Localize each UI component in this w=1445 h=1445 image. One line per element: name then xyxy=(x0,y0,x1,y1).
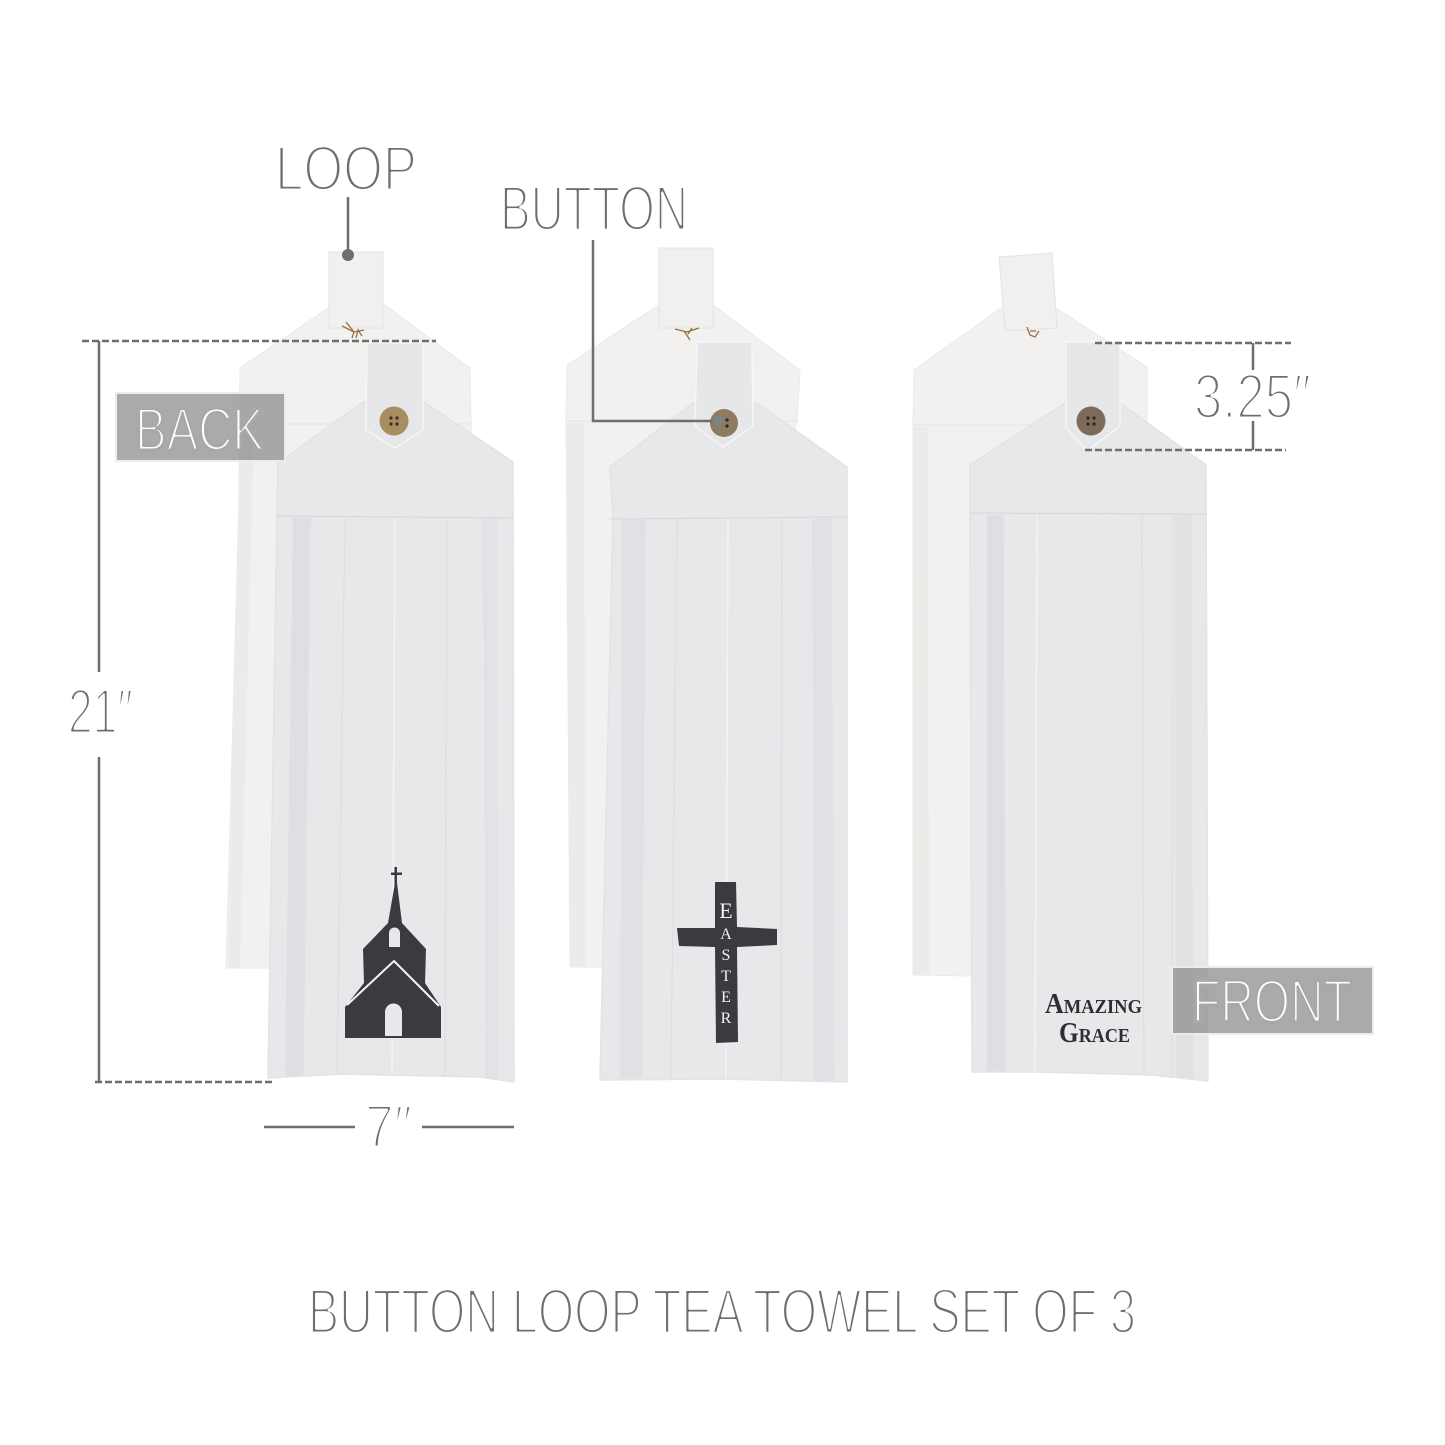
button xyxy=(710,409,738,437)
back towel: cross xyxy=(566,248,800,967)
icon: Easter cross print: A xyxy=(720,926,732,943)
dimension: flap 3.25 inches: 3.25″ xyxy=(1194,362,1311,432)
icon: Easter cross print: S xyxy=(722,947,730,964)
label: back: BACK xyxy=(135,396,264,463)
callout: loop label xyxy=(275,134,417,261)
text: Amazing Grace print: AMAZING xyxy=(1045,989,1142,1020)
title: BUTTON LOOP TEA TOWEL SET OF 3 xyxy=(308,1277,1136,1347)
callout: button label: BUTTON xyxy=(500,174,688,244)
text: Amazing Grace print xyxy=(1045,989,1142,1049)
towel set: Amazing Grace xyxy=(913,253,1208,1081)
label: front: FRONT xyxy=(1192,968,1352,1035)
text: Amazing Grace print: GRACE xyxy=(1059,1018,1130,1049)
icon: Easter cross print: E xyxy=(719,898,733,923)
dimension: height 21 inches: 21″ xyxy=(68,677,133,747)
icon: Easter cross print: E xyxy=(721,989,731,1006)
icon: church print xyxy=(345,867,441,1038)
front towel: cross xyxy=(600,342,847,1082)
icon: Easter cross print: T xyxy=(721,968,731,985)
towel set: church xyxy=(226,252,514,1082)
button xyxy=(380,406,408,436)
icon: Easter cross print xyxy=(677,882,777,1043)
callout: loop label: LOOP xyxy=(275,134,417,204)
callout: button label xyxy=(500,174,723,426)
back towel: Amazing Grace xyxy=(913,253,1147,976)
button xyxy=(1076,406,1106,436)
dimension: width 7 inches: 7″ xyxy=(365,1093,412,1160)
back towel: church xyxy=(226,252,471,968)
towel set: cross xyxy=(566,248,847,1082)
icon: Easter cross print: R xyxy=(721,1010,732,1027)
front towel: church xyxy=(268,343,514,1082)
front towel: Amazing Grace xyxy=(970,342,1208,1081)
